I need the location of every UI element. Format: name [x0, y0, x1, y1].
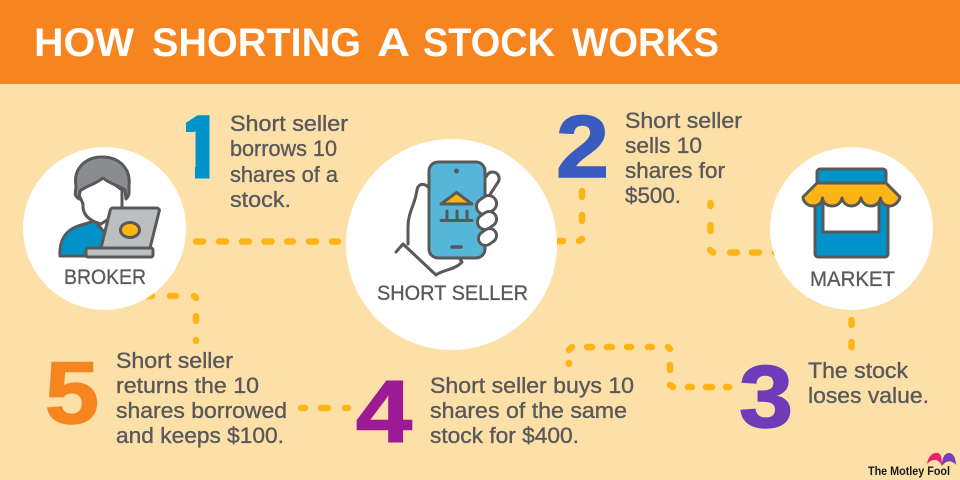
number 3: 3 [739, 347, 793, 446]
label: broker: BROKER [64, 266, 146, 289]
number 1: 1 [177, 98, 226, 197]
step 1 text: Short seller [230, 111, 348, 136]
step 4 text: shares of the same [430, 398, 627, 423]
step 4 text [430, 373, 634, 448]
step 3 text [808, 358, 929, 408]
step 2 text: Short seller [625, 108, 742, 133]
dotted connector: short seller to step 2 [550, 191, 582, 241]
step 4 text: stock for $400. [430, 423, 579, 448]
step 3 [739, 347, 929, 446]
step 2 text: $500. [625, 183, 681, 208]
step 2 [556, 97, 742, 208]
icon: hand holding phone [396, 162, 502, 275]
title: SHORTING [152, 21, 361, 65]
step 2 text [625, 108, 742, 208]
step 2 text: shares for [625, 158, 725, 183]
step 2 text: sells 10 [625, 133, 702, 158]
step 5 text: shares borrowed [116, 398, 287, 423]
header banner [0, 0, 960, 84]
icon: market stall [803, 169, 900, 257]
number 5: 5 [45, 343, 99, 442]
step 5 text [116, 348, 287, 448]
step 1 [186, 114, 348, 208]
logo: The Motley Fool: The Motley Fool [868, 466, 950, 478]
title: A [377, 21, 410, 65]
step 1 text: shares of a [230, 162, 339, 187]
step 4 [356, 362, 634, 461]
step 5 text: Short seller [116, 348, 233, 373]
panel: short seller [346, 139, 557, 350]
dotted connector: step 2 to market [710, 203, 780, 252]
step 3 text: loses value. [808, 383, 929, 408]
step 5 text: and keeps $100. [116, 423, 284, 448]
dotted connector: step 4 to step 5 [301, 405, 348, 411]
label: short seller: SHORT SELLER [377, 282, 528, 305]
title: STOCK [423, 21, 555, 65]
step 1 text: stock. [230, 187, 291, 212]
title: WORKS [572, 21, 719, 65]
step 4 text: Short seller buys 10 [430, 373, 634, 398]
label: market: MARKET [810, 268, 895, 291]
number 4: 4 [356, 362, 412, 461]
panel: broker [23, 147, 186, 310]
panel: market [770, 147, 933, 310]
title: HOW [34, 21, 134, 65]
icon: broker at laptop [60, 157, 159, 257]
dotted connector: step 3 to step 4 [569, 347, 729, 387]
icon: jester hat [927, 453, 956, 466]
dotted connector: step 5 to broker [140, 296, 196, 341]
logo: The Motley Fool [868, 453, 956, 478]
dotted connector: market to step 3 [848, 320, 855, 347]
step 5 [45, 343, 287, 448]
step 5 text: returns the 10 [116, 373, 259, 398]
step 3 text: The stock [808, 358, 909, 383]
step 1 text: borrows 10 [230, 136, 337, 161]
dotted connector: broker to short seller [196, 238, 338, 245]
title [34, 21, 719, 65]
step 1 text [230, 111, 348, 212]
number 2: 2 [556, 97, 609, 196]
